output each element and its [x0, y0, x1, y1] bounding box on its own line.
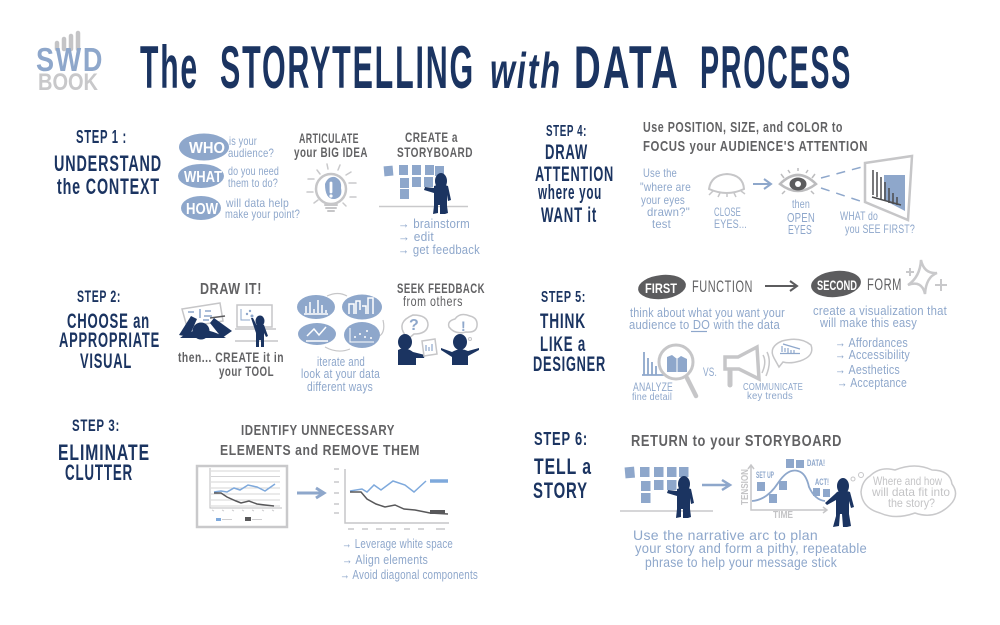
form bullets: → Affordances — [835, 335, 908, 350]
storyboard bullets: → get feedback — [398, 242, 480, 257]
test caption: test — [652, 217, 671, 231]
who what how questions: audience? — [228, 146, 274, 160]
caption: create it in your tool — [178, 349, 284, 379]
test caption: your eyes — [641, 193, 685, 207]
clutter bullets: → Avoid diagonal components — [340, 567, 478, 582]
heading: step 2: STEP 2: — [77, 287, 121, 306]
who what how questions: will data help — [225, 196, 289, 210]
storyboard bullets — [398, 216, 480, 257]
clutter bullets: → Leverage white space — [342, 536, 453, 551]
clutter bullets: → Align elements — [342, 552, 428, 567]
caption: then open eyes — [787, 197, 815, 237]
form text: will make this easy — [819, 315, 917, 330]
heading: step 2 — [59, 287, 160, 373]
thought cloud: the story? — [888, 496, 935, 510]
narrative arc chart: DATA! — [807, 458, 825, 468]
icon: light bulb — [307, 164, 356, 211]
form bullets: → Accessibility — [835, 347, 910, 362]
title: DATA — [574, 34, 680, 101]
caption: analyze — [632, 380, 673, 403]
narrative text: your story and form a pithy, repeatable — [635, 540, 867, 556]
heading: step 5: LIKE a — [540, 333, 586, 356]
narrative arc chart: ACT! — [815, 477, 829, 487]
icon: megaphone with speech bubble — [725, 339, 812, 385]
narrative text: Use the narrative arc to plan — [633, 527, 818, 543]
caption: close eyes: CLOSE — [714, 205, 741, 219]
heading: step 2: CHOOSE an — [67, 310, 150, 333]
storyboard heading: CREATE a — [405, 129, 458, 145]
title: with — [490, 43, 562, 99]
thought cloud: will data fit into — [871, 485, 950, 499]
sketching figure from above — [179, 303, 232, 340]
caption: iterate: look at your data — [301, 366, 380, 381]
focus heading: FOCUS your AUDIENCE'S ATTENTION — [643, 138, 868, 155]
heading: step 4: DRAW — [545, 141, 588, 164]
icon: open eye — [780, 168, 816, 194]
narrative arc chart: SET UP — [756, 470, 774, 480]
storyboard heading — [397, 129, 473, 160]
clutter bullets — [340, 536, 478, 582]
icon: sparkles — [906, 260, 947, 294]
panel: step 2 choose an appropriate visual — [59, 280, 485, 394]
form bullets: → Acceptance — [837, 375, 907, 390]
caption: close eyes — [714, 205, 747, 231]
form text — [813, 303, 947, 330]
who what how questions: WHO — [189, 140, 225, 157]
who what how questions: them to do? — [228, 176, 278, 190]
thought cloud: Where and how — [873, 474, 942, 488]
narrative arc chart — [740, 458, 830, 521]
heading: step 4: where you — [537, 182, 602, 204]
caption: what do you see first — [840, 209, 915, 236]
return heading: RETURN to your STORYBOARD — [631, 433, 842, 450]
title: The — [140, 34, 199, 101]
seek feedback heading — [397, 280, 485, 309]
test caption — [640, 166, 691, 231]
caption: analyze: fine detail — [632, 392, 672, 403]
who what how questions: make your point? — [225, 207, 300, 221]
heading: step 1 — [54, 127, 162, 199]
focus heading: Use POSITION, SIZE, and COLOR to — [643, 119, 843, 136]
panel: step 3 eliminate clutter — [58, 416, 478, 582]
heading: step 6: STEP 6: — [534, 429, 588, 449]
arrow — [297, 488, 324, 498]
heading: step 5: STEP 5: — [541, 289, 586, 306]
feedback figures with speech bubbles — [398, 315, 479, 365]
arrow — [765, 281, 797, 291]
who what how questions: WHAT — [184, 169, 222, 186]
test caption: "where are — [640, 180, 691, 194]
panel: step 4 draw attention — [535, 119, 915, 237]
title: STORYTELLING — [220, 34, 475, 101]
heading: step 1: the CONTEXT — [57, 174, 160, 199]
caption: then open eyes: EYES — [788, 222, 812, 237]
sight lines — [821, 167, 863, 202]
caption: what do you see first: you SEE FIRST? — [845, 222, 915, 236]
storyboard bullets: → edit — [398, 229, 434, 244]
narrative text — [633, 527, 867, 570]
form text: create a visualization that — [813, 303, 947, 318]
heading: step 3: STEP 3: — [72, 416, 120, 435]
heading: step 6: TELL a — [534, 454, 592, 479]
heading: step 5 — [533, 289, 606, 376]
who what how questions: do you need — [228, 164, 279, 178]
heading: step 2: VISUAL — [80, 350, 132, 373]
narrative text: phrase to help your message stick — [645, 554, 838, 570]
caption: then open eyes: OPEN — [787, 210, 815, 225]
form bullets — [835, 335, 910, 390]
logo: SWD Book — [36, 33, 104, 96]
caption: analyze: ANALYZE — [633, 380, 673, 394]
vs: VS. — [703, 365, 717, 379]
second form: FORM — [867, 275, 902, 294]
draw it heading: DRAW IT! — [200, 281, 262, 298]
heading: step 1: UNDERSTAND — [54, 151, 162, 176]
panel: step 1 understand the context — [54, 127, 480, 257]
who what how questions: is your — [229, 134, 257, 148]
test caption: drawn?" — [647, 205, 690, 219]
heading: step 5: DESIGNER — [533, 353, 606, 376]
first function: FUNCTION — [692, 277, 753, 296]
caption: communicate: key trends — [747, 391, 793, 402]
function text — [629, 305, 785, 332]
thought cloud — [851, 466, 956, 516]
heading: step 5: THINK — [540, 310, 586, 333]
first function: FIRST — [645, 280, 677, 296]
focus heading — [643, 119, 868, 155]
caption: communicate — [743, 382, 803, 402]
seek feedback heading: SEEK FEEDBACK — [397, 280, 485, 296]
heading: step 4: WANT it — [541, 204, 597, 227]
first function — [637, 273, 753, 301]
who what how questions — [178, 134, 300, 221]
heading: step 3 — [58, 416, 150, 485]
logo: SWD Book: SWD — [36, 41, 104, 78]
panel: step 6 tell a story — [533, 429, 956, 570]
heading: step 1: STEP 1 : — [76, 127, 127, 147]
heading: step 3: ELIMINATE — [58, 440, 150, 465]
heading: step 4: ATTENTION — [535, 163, 614, 186]
storyboard bullets: → brainstorm — [398, 216, 470, 231]
caption: communicate: COMMUNICATE — [743, 382, 803, 393]
icon: bars under magnifier — [642, 345, 696, 396]
caption: iterate: iterate and — [317, 354, 365, 369]
narrative arc chart: TENSION — [740, 469, 751, 505]
seek feedback heading: from others — [403, 293, 463, 309]
cluttered chart — [197, 466, 287, 527]
caption: close eyes: EYES... — [714, 217, 747, 231]
function text: think about what you want your — [630, 305, 785, 320]
decluttered chart — [334, 469, 449, 529]
arrow — [753, 179, 771, 189]
caption: then open eyes: then — [792, 197, 810, 211]
feedback figures with speech bubbles: ? — [409, 317, 419, 334]
identify heading: ELEMENTS and REMOVE THEM — [220, 442, 420, 459]
identify heading — [220, 422, 420, 459]
heading: step 6 — [533, 429, 592, 503]
narrative arc chart: TIME — [773, 510, 793, 521]
caption: iterate — [301, 354, 380, 394]
heading: step 6: STORY — [533, 478, 588, 503]
heading: step 3: CLUTTER — [65, 460, 133, 485]
arrow — [702, 480, 730, 490]
heading: step 4: STEP 4: — [546, 123, 587, 140]
identify heading: IDENTIFY UNNECESSARY — [241, 422, 395, 439]
panel: step 5 think like a designer — [533, 260, 947, 403]
caption: create it in your tool: your TOOL — [219, 363, 274, 379]
icon: closed eye — [709, 174, 745, 197]
heading: step 4 — [535, 123, 614, 227]
whiteboard with figure — [235, 305, 278, 347]
function text: audience to DO with the data — [629, 317, 780, 332]
second form — [810, 268, 902, 300]
storyboard with figure — [620, 467, 713, 518]
feedback figures with speech bubbles: ! — [461, 318, 466, 334]
big idea heading — [294, 130, 368, 160]
presenting figure — [825, 478, 854, 527]
screen with bar chart — [865, 156, 912, 220]
heading: step 2: APPROPRIATE — [59, 329, 160, 352]
storyboard with figure — [379, 165, 468, 214]
caption: iterate: different ways — [307, 379, 373, 394]
caption: what do you see first: WHAT do — [840, 209, 878, 223]
big idea heading: your BIG IDEA — [294, 144, 368, 160]
big idea heading: ARTICULATE — [299, 130, 359, 146]
logo: SWD Book: BOOK — [38, 69, 99, 96]
four chart types — [297, 294, 384, 351]
who what how questions: HOW — [186, 201, 219, 218]
caption: create it in your tool: then... CREATE it in — [178, 349, 284, 365]
form bullets: → Aesthetics — [835, 362, 900, 377]
second form: SECOND — [817, 277, 857, 293]
test caption: Use the — [643, 166, 677, 180]
storyboard heading: STORYBOARD — [397, 144, 473, 160]
